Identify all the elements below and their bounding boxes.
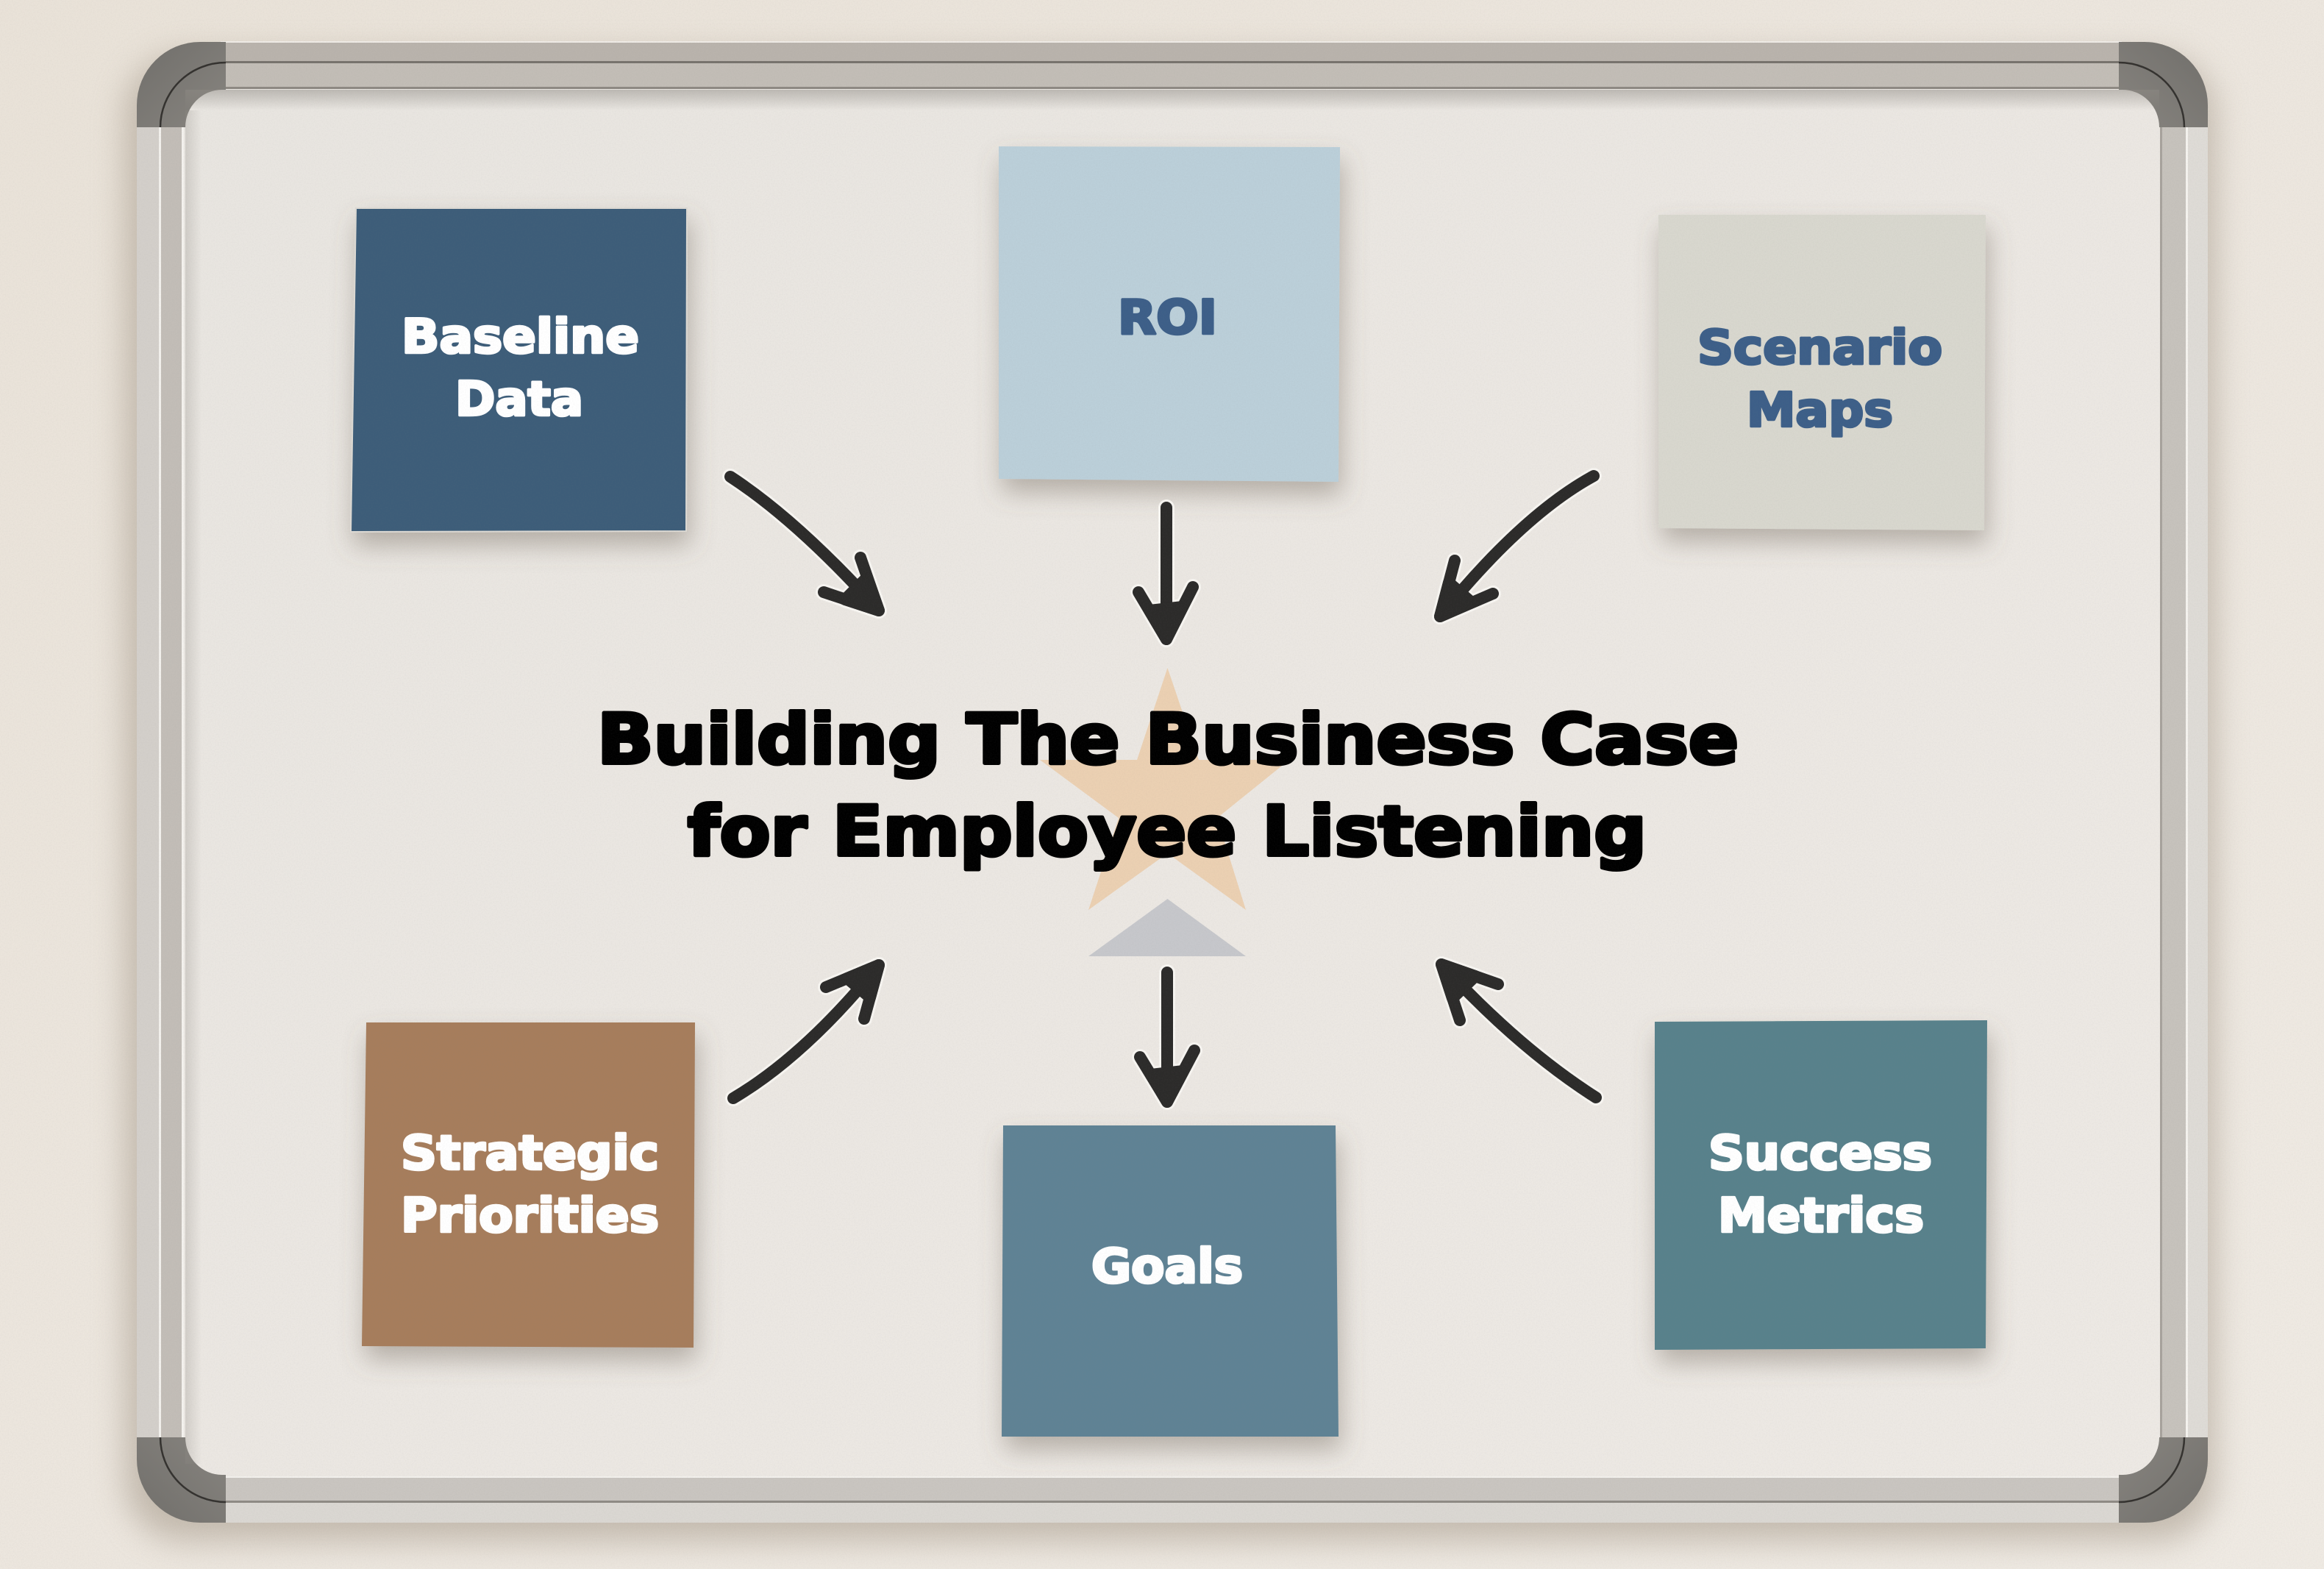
board surface xyxy=(162,66,2184,1501)
note: Scenario Maps xyxy=(1658,215,1986,530)
corner bottom-right xyxy=(2119,1437,2208,1523)
icon: triangle xyxy=(1088,899,1246,956)
left rail xyxy=(137,121,184,1442)
title xyxy=(597,700,1739,872)
title: for Employee Listening xyxy=(688,791,1647,872)
note: Goals: Goals xyxy=(1091,1240,1243,1295)
note: Baseline Data: Data xyxy=(455,372,583,427)
note: Success Metrics: Success xyxy=(1708,1127,1932,1181)
note: Scenario Maps: Maps xyxy=(1747,384,1893,438)
arrow: Strategic Priorities to centre xyxy=(733,965,879,1098)
note: ROI xyxy=(999,146,1340,482)
arrow: Scenario Maps to centre xyxy=(1440,476,1594,616)
note: Strategic Priorities: Strategic xyxy=(401,1127,659,1181)
title: Building The Business Case xyxy=(597,700,1739,780)
note: Success Metrics xyxy=(1655,1020,1987,1350)
board inner shade left xyxy=(185,110,202,1464)
corner top-right xyxy=(2119,42,2208,127)
note: Baseline Data xyxy=(351,208,687,532)
board inner shade top xyxy=(185,90,2159,110)
top rail xyxy=(221,41,2122,89)
arrow: centre to Goals xyxy=(1140,972,1194,1102)
note: Strategic Priorities: Priorities xyxy=(401,1189,659,1243)
arrow: Baseline Data to centre xyxy=(730,477,879,611)
note: Strategic Priorities xyxy=(362,1022,695,1348)
bottom rail xyxy=(221,1476,2122,1523)
note: Goals xyxy=(1002,1125,1339,1437)
right rail xyxy=(2160,121,2208,1442)
arrow: ROI to centre xyxy=(1138,508,1193,639)
note: Scenario Maps: Scenario xyxy=(1697,321,1942,375)
note: Success Metrics: Metrics xyxy=(1718,1189,1924,1243)
arrow: Success Metrics to centre xyxy=(1441,964,1596,1097)
corner bottom-left xyxy=(137,1437,226,1523)
icon: star xyxy=(1040,668,1289,910)
note: Baseline Data: Baseline xyxy=(402,310,639,365)
corner top-left xyxy=(137,42,226,127)
note: ROI: ROI xyxy=(1118,291,1217,346)
